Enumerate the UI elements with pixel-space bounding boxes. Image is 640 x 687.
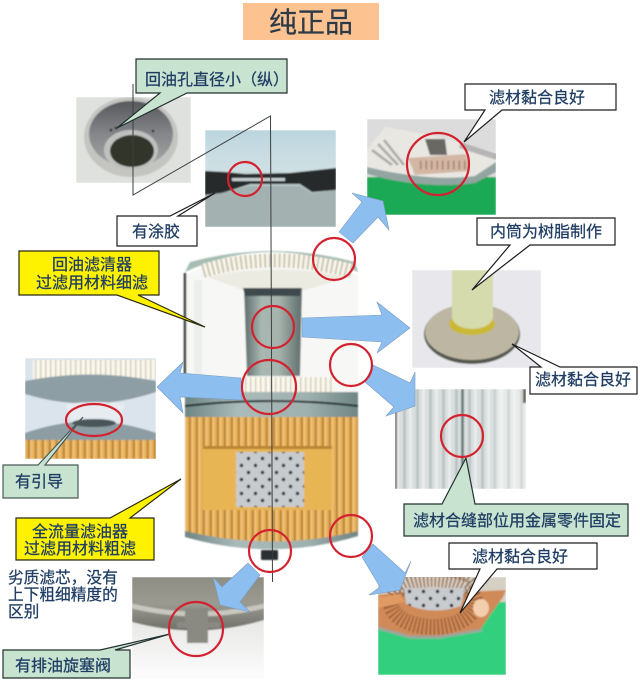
arrow: to guide photo <box>157 362 242 413</box>
callout: return oil filter fine filtration: 过滤用材料细滤 <box>36 274 148 292</box>
return oil filter section (white) <box>185 251 358 392</box>
callout: full-flow filter coarse filtration: 过滤用材料粗滤 <box>24 540 136 558</box>
callout: drain plug valve: 有排油旋塞阀 <box>15 657 111 675</box>
note: inferior filter has no precision difference: 上下粗细精度的 <box>8 586 118 604</box>
callout: media bonded well, top: 滤材黏合良好 <box>489 89 585 107</box>
callout: media bonded well, bottom <box>449 543 597 613</box>
callout: full-flow filter coarse filtration <box>16 479 181 560</box>
photo: oil return hole <box>76 97 191 183</box>
note: inferior filter has no precision difference: 区别 <box>8 603 39 621</box>
callout: inner tube made of resin <box>472 218 615 290</box>
callout: glue coated <box>117 193 215 246</box>
callout: glue coated: 有涂胶 <box>132 223 180 241</box>
photo: media seam <box>395 389 526 489</box>
callout: small oil return hole <box>117 59 289 128</box>
callout: guide: 有引导 <box>15 473 63 491</box>
photo: glue coating <box>205 130 336 227</box>
callout: full-flow filter coarse filtration: 全流量滤油器 <box>32 523 128 541</box>
pointer lines <box>133 84 272 582</box>
arrow: to bottom bonding photo <box>362 544 411 595</box>
callout: seam fixed with metal part <box>404 458 628 536</box>
callout: return oil filter fine filtration <box>19 251 205 327</box>
callout: media bonded well, top <box>464 84 616 142</box>
title: 纯正品 <box>269 7 353 38</box>
callout: media bonded well, middle <box>512 344 637 394</box>
arrow: to drain plug photo <box>213 563 260 612</box>
arrow: to resin tube photo <box>302 302 410 353</box>
callout: media bonded well, middle: 滤材黏合良好 <box>535 371 631 389</box>
callout: seam fixed with metal part: 滤材合缝部位用金属零件固定 <box>413 512 621 530</box>
callout: media bonded well, bottom: 滤材黏合良好 <box>472 548 568 566</box>
title <box>243 3 379 40</box>
callout: guide <box>3 417 83 498</box>
lid between sections <box>185 392 358 417</box>
note: inferior filter has no precision difference: 劣质滤芯，没有 <box>8 569 118 587</box>
photo: resin inner tube <box>412 270 541 368</box>
photo: drain plug valve <box>132 577 264 664</box>
full-flow filter section (orange) <box>185 417 358 560</box>
arrow: to top bonding photo <box>339 193 389 243</box>
callout: small oil return hole: 回油孔直径小（纵） <box>145 71 289 89</box>
photo: top media bonding <box>367 119 496 215</box>
note: inferior filter has no precision difference <box>8 569 118 621</box>
callout: inner tube made of resin: 内筒为树脂制作 <box>490 223 602 241</box>
arrow: to seam photo <box>365 365 415 416</box>
photo: bottom media bonding <box>378 577 506 675</box>
main filter cutaway <box>185 251 358 560</box>
callout: drain plug valve <box>3 634 170 678</box>
photo: guide <box>25 358 156 459</box>
callout: return oil filter fine filtration: 回油滤清器 <box>52 256 132 274</box>
red highlight circles <box>66 133 483 656</box>
